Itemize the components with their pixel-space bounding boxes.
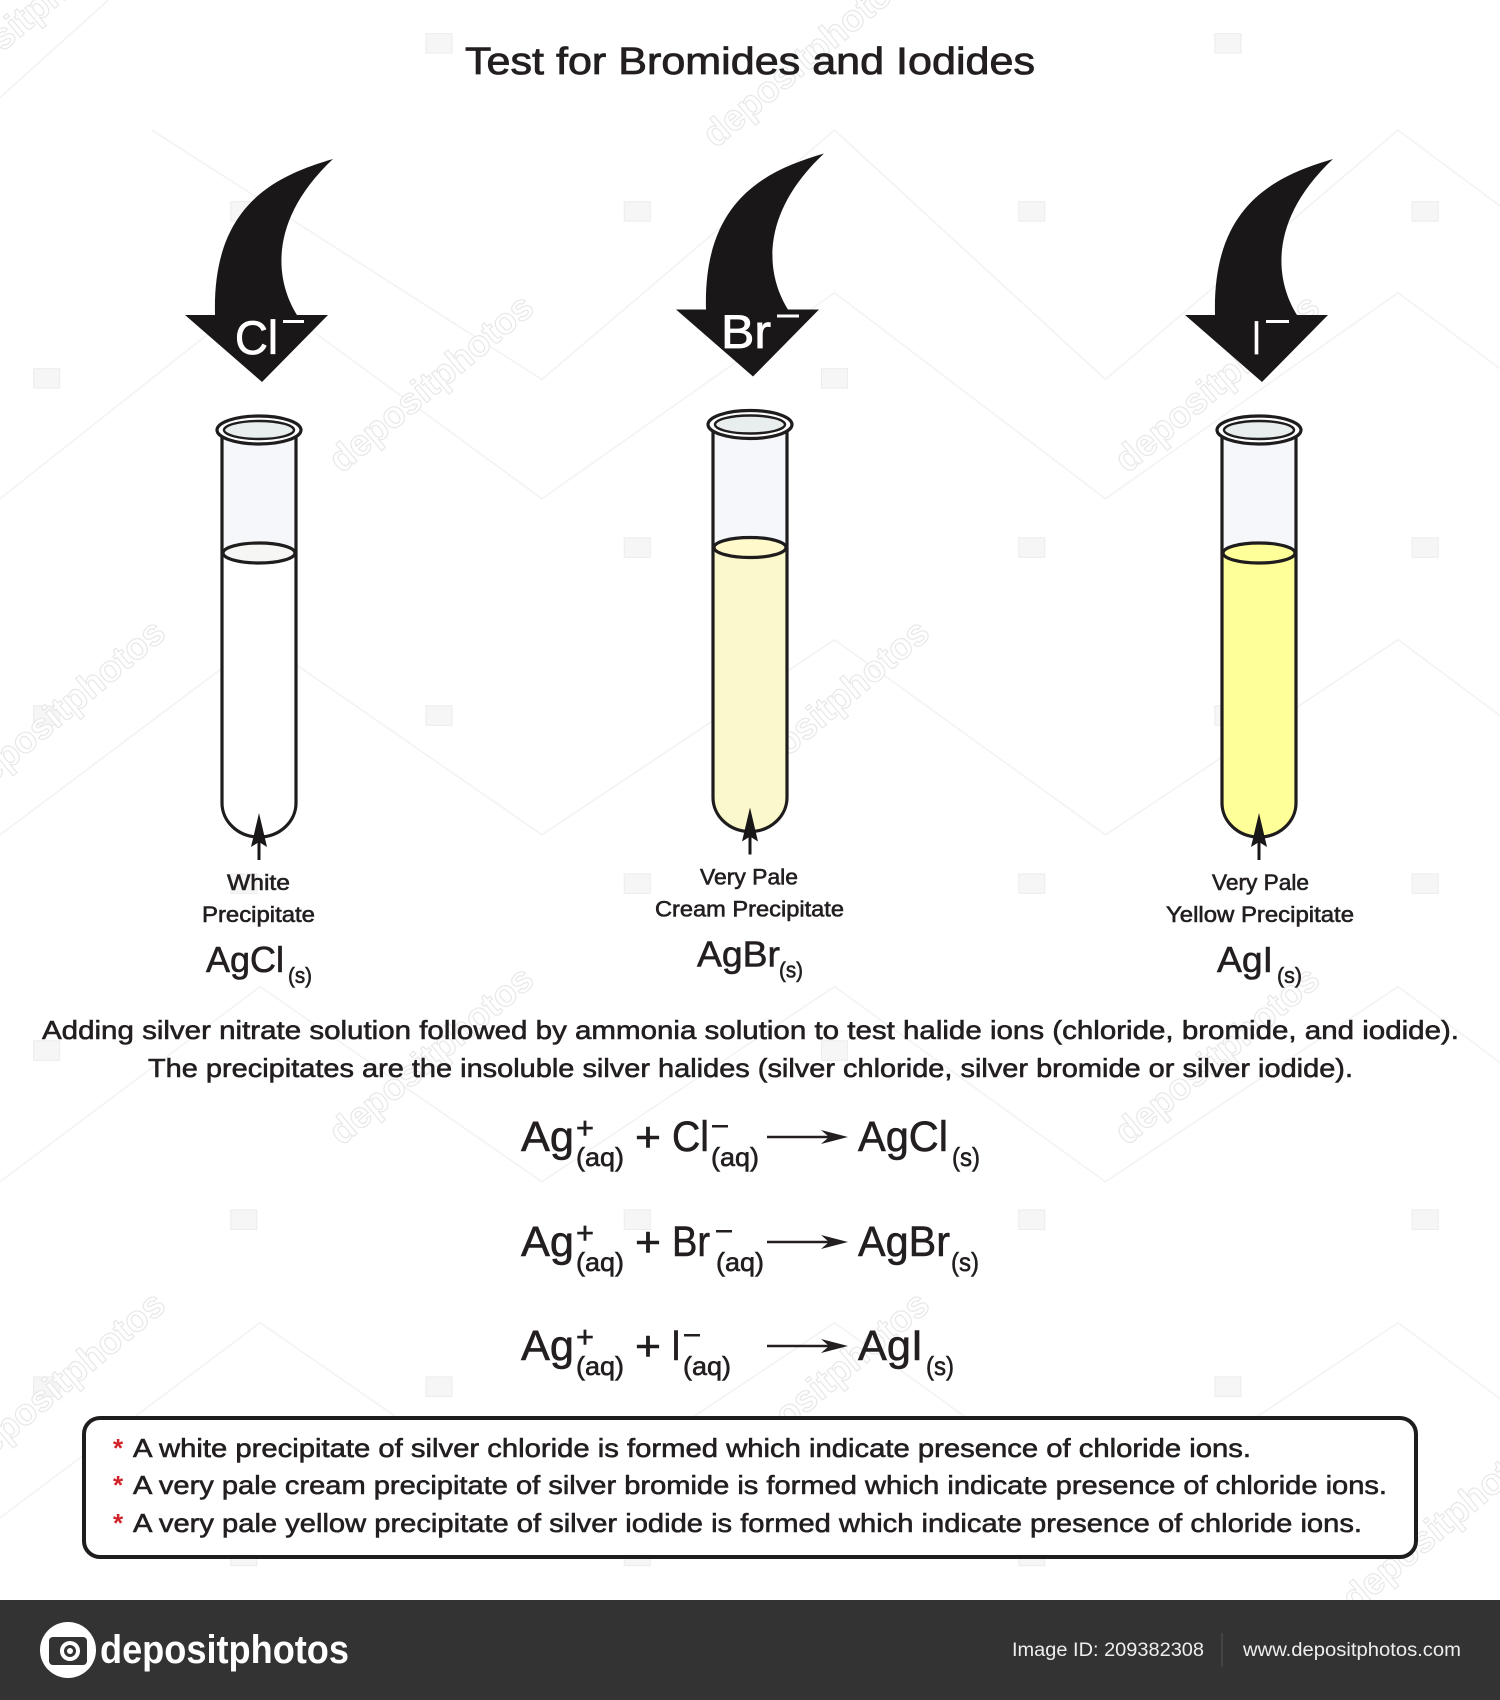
equation: silver iodide: + (576, 1321, 594, 1354)
equation: silver chloride (521, 1112, 980, 1172)
formula: AgBr: AgBr (697, 934, 780, 974)
label: very pale cream precipitate: Very Pale (700, 864, 798, 890)
panel: bromide test (655, 154, 844, 982)
equation: silver iodide: (aq) (683, 1351, 731, 1381)
footer bar (0, 1600, 1500, 1700)
watermark: depositphotos (1106, 958, 1327, 1152)
pointer arrow (251, 813, 267, 860)
watermark: depositphotos (321, 958, 541, 1152)
formula: AgBr: (s) (779, 958, 803, 982)
formula: AgCl: AgCl (206, 939, 284, 980)
equation: silver chloride: Ag (521, 1113, 574, 1161)
callout: conclusions box: A very pale cream precipitate of silver bromide is formed which indicate presence of chloride ions. (133, 1470, 1387, 1500)
equation: silver bromide: Ag (521, 1218, 574, 1266)
equation: silver iodide: (aq) (576, 1351, 624, 1381)
label: very pale yellow precipitate: Yellow Precipitate (1166, 902, 1354, 927)
formula: AgBr (697, 934, 803, 982)
equation: silver bromide: Br (672, 1218, 710, 1266)
image id: Image ID: 209382308 (1012, 1640, 1204, 1661)
title: Test for Bromides and Iodides (465, 41, 1035, 83)
equation: silver bromide: (aq) (576, 1247, 624, 1277)
pointer arrow (742, 808, 758, 854)
panel: iodide test (1166, 159, 1354, 988)
description text: The precipitates are the insoluble silver halides (silver chloride, silver bromide or silver iodide). (148, 1053, 1353, 1083)
equation: silver iodide: I (671, 1322, 681, 1370)
callout: conclusions box: * (113, 1470, 124, 1500)
equation: silver chloride: (aq) (711, 1142, 759, 1172)
formula: AgI: (s) (1277, 963, 1302, 988)
equation: silver chloride: Cl (672, 1113, 709, 1161)
watermark: depositphotos (1106, 286, 1327, 480)
equation: silver bromide: AgBr (858, 1218, 950, 1266)
equation: silver chloride: + (635, 1113, 661, 1160)
watermark: depositphotos (321, 286, 541, 480)
callout: conclusions box: A very pale yellow precipitate of silver iodide is formed which indicate presence of chloride ions. (133, 1508, 1362, 1538)
equations (521, 1112, 980, 1381)
logo wordmark: depositphotos (100, 1628, 349, 1672)
equation: silver iodide: + (635, 1322, 661, 1369)
equation: silver chloride: + (576, 1112, 594, 1145)
equation: silver bromide (521, 1217, 979, 1277)
test tube: white precipitate (217, 416, 301, 837)
label: white precipitate: Precipitate (202, 902, 315, 927)
arrow: chloride ion (185, 159, 333, 382)
arrow: bromide ion: Br (721, 305, 771, 358)
formula: AgCl: (s) (288, 963, 312, 988)
watermark: depositphotos (716, 1283, 937, 1478)
callout: conclusions box: A white precipitate of silver chloride is formed which indicate presence of chloride ions. (133, 1433, 1251, 1463)
label: white precipitate (202, 870, 315, 927)
equation: silver bromide: + (576, 1217, 594, 1250)
panel: chloride test (185, 159, 333, 988)
description text: Adding silver nitrate solution followed by ammonia solution to test halide ions (chloride, bromide, and iodide). (42, 1015, 1459, 1045)
equation: silver iodide: (s) (926, 1351, 954, 1381)
arrow: chloride ion: Cl (235, 311, 278, 364)
equation: silver iodide: Ag (521, 1322, 574, 1370)
equation: silver chloride: (s) (952, 1142, 980, 1172)
equation: silver chloride: AgCl (858, 1113, 948, 1161)
arrow: iodide ion: I (1252, 311, 1261, 364)
equation: silver iodide (521, 1321, 954, 1381)
callout: conclusions box (84, 1418, 1416, 1557)
pointer arrow (1251, 813, 1267, 860)
test tube: yellow precipitate (1217, 416, 1301, 837)
label: very pale yellow precipitate (1166, 870, 1354, 927)
label: very pale cream precipitate (655, 864, 844, 922)
description text (42, 1015, 1459, 1083)
formula: AgI: AgI (1217, 939, 1273, 980)
callout: conclusions box: * (113, 1433, 124, 1463)
equation: silver chloride: (aq) (576, 1142, 624, 1172)
arrow: bromide ion (676, 154, 824, 376)
watermark: depositphotos (716, 611, 937, 805)
website url: www.depositphotos.com (1242, 1640, 1461, 1661)
equation: silver bromide: + (635, 1218, 661, 1265)
label: white precipitate: White (227, 870, 290, 895)
equation: silver bromide: (aq) (716, 1247, 764, 1277)
equation: silver bromide: (s) (951, 1247, 979, 1277)
test tube: cream precipitate (708, 410, 792, 832)
equation: silver iodide: AgI (858, 1322, 923, 1370)
formula: AgCl (206, 939, 312, 988)
callout: conclusions box: * (113, 1508, 124, 1538)
arrow: iodide ion (1185, 159, 1333, 382)
formula: AgI (1217, 939, 1302, 988)
label: very pale cream precipitate: Cream Precipitate (655, 896, 844, 922)
label: very pale yellow precipitate: Very Pale (1212, 870, 1309, 895)
icon: camera logo (40, 1622, 96, 1678)
